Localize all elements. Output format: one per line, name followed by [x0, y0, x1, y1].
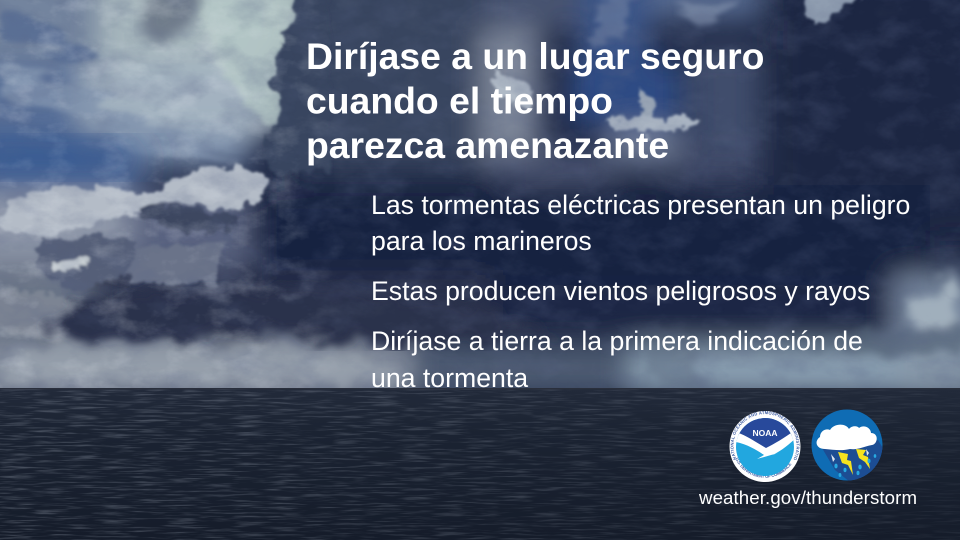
clear blue sky at left — [0, 140, 150, 175]
rain drops — [834, 454, 876, 477]
lit cumulus and dark pockets at lower left — [0, 165, 270, 345]
cloud — [817, 425, 877, 450]
title: parezca amenazante — [306, 124, 669, 166]
icon: NOAA logo: NATIONAL OCEANIC AND ATMOSPHERIC ADMINISTRATION — [730, 411, 800, 460]
distant rain shaft and clear sky at right — [10, 275, 960, 389]
background photo: dark sea — [0, 388, 960, 540]
title: cuando el tiempo — [306, 80, 613, 122]
icon: NOAA logo: NOAA — [752, 428, 778, 438]
statement: danger to sailors: Las tormentas eléctricas presentan un peligro — [371, 190, 910, 220]
body text — [371, 190, 910, 393]
main dark storm cloud edge — [258, 0, 330, 175]
background photo: stormy sky — [0, 0, 960, 400]
lightning bolts — [838, 452, 853, 475]
wispy cirrus clouds — [0, 0, 735, 170]
dark cloud underside — [40, 285, 560, 345]
web address: weather.gov/thunderstorm — [698, 487, 917, 508]
icon: thunderstorm — [812, 410, 882, 480]
title — [306, 35, 764, 166]
statement: head to land: una tormenta — [371, 363, 528, 393]
statement: winds and lightning: Estas producen vientos peligrosos y rayos — [371, 276, 870, 306]
statement: danger to sailors: para los marineros — [371, 226, 592, 256]
icon: NOAA logo: U.S. DEPARTMENT OF COMMERCE — [736, 458, 792, 478]
statement: danger to sailors — [371, 190, 910, 256]
low-frequency colour patches — [0, 0, 960, 400]
icon: NOAA logo — [730, 411, 800, 482]
statement: head to land: Diríjase a tierra a la primera indicación de — [371, 326, 863, 356]
cloud texture — [0, 0, 960, 389]
grey patch in upper cirrus — [140, 0, 205, 45]
bright edges around the blue gap — [490, 0, 865, 134]
statement: head to land — [371, 326, 863, 393]
title: Diríjase a un lugar seguro — [306, 35, 764, 77]
